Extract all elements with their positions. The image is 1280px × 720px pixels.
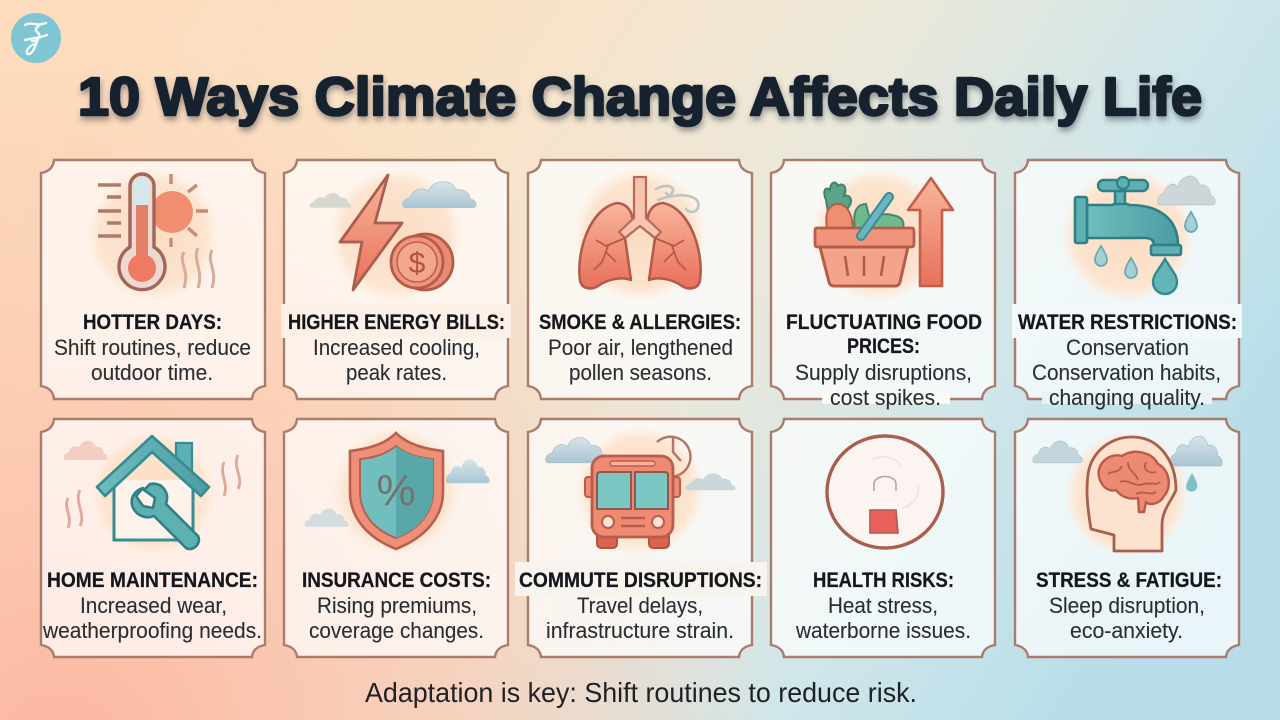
panel: fluctuating food prices [771,160,995,410]
description line 3: changing quality. [1049,385,1205,410]
panel: stress and fatigue [1015,419,1239,657]
description line 2: outdoor time. [91,360,213,385]
description: Travel delays, [577,593,703,618]
panel: health risks [771,419,995,657]
description line 2: waterborne issues. [795,618,971,643]
panel: insurance costs [284,419,508,657]
heading: STRESS & FATIGUE: [1036,569,1222,592]
icon: head with brain [1033,433,1222,555]
icon: shield with percent: % [376,466,416,515]
description line 2: weatherproofing needs. [42,618,262,643]
description line 2: infrastructure strain. [546,618,734,643]
icon: lightning bolt, coin and clouds: $ [409,247,426,280]
panel: higher energy bills [281,160,511,399]
label backing bottom [1042,392,1212,404]
heading: HIGHER ENERGY BILLS: [288,311,505,334]
heading: FLUCTUATING FOOD [786,311,982,334]
icon: thermometer and sun [88,170,218,300]
label backing [281,304,511,338]
panel: smoke and allergies [528,160,752,399]
heading: WATER RESTRICTIONS: [1018,311,1237,334]
heading: HOTTER DAYS: [83,311,222,334]
description line 2: Conservation habits, [1032,360,1221,385]
label backing [822,392,950,404]
heading line 2: PRICES: [847,335,920,358]
icon: dripping tap [1063,170,1215,300]
description line 2: pollen seasons. [569,360,712,385]
panel: home maintenance [41,419,265,657]
icon: house and wrench [64,432,240,556]
label backing [515,562,767,596]
icon: lungs [575,170,705,300]
title: 10 Ways Climate Change Affects Daily Life [78,67,1202,127]
description: Sleep disruption, [1049,593,1205,618]
heading: COMMUTE DISRUPTIONS: [519,569,762,592]
description line 2: eco-anxiety. [1070,618,1183,643]
description line 2: peak rates. [346,360,447,385]
description: Increased cooling, [313,335,480,360]
footer tagline: Adaptation is key: Shift routines to reduce risk. [365,677,917,708]
heading: INSURANCE COSTS: [302,569,491,592]
panel: water restrictions [1012,160,1242,410]
heading: HEALTH RISKS: [813,569,954,592]
heading: SMOKE & ALLERGIES: [539,311,741,334]
description: Poor air, lengthened [548,335,733,360]
description: Shift routines, reduce [54,335,251,360]
description line 2: coverage changes. [309,618,484,643]
icon: lightning bolt, coin and clouds [310,170,476,300]
description: Rising premiums, [317,593,477,618]
description: Conservation [1066,335,1189,360]
icon: shield with percent [305,428,490,554]
description: Increased wear, [80,593,227,618]
heading: HOME MAINTENANCE: [47,569,258,592]
panel: commute disruptions [515,419,767,657]
logo badge [11,13,61,63]
description: Supply disruptions, [795,360,972,385]
description: Heat stress, [828,593,938,618]
icon: ring with red square [827,436,943,548]
icon: basket with rising arrow [813,170,953,300]
panel: hotter days [41,160,265,399]
description line 2: cost spikes. [830,385,941,410]
icon: bus, clock and clouds [546,428,735,554]
label backing [1012,304,1242,338]
